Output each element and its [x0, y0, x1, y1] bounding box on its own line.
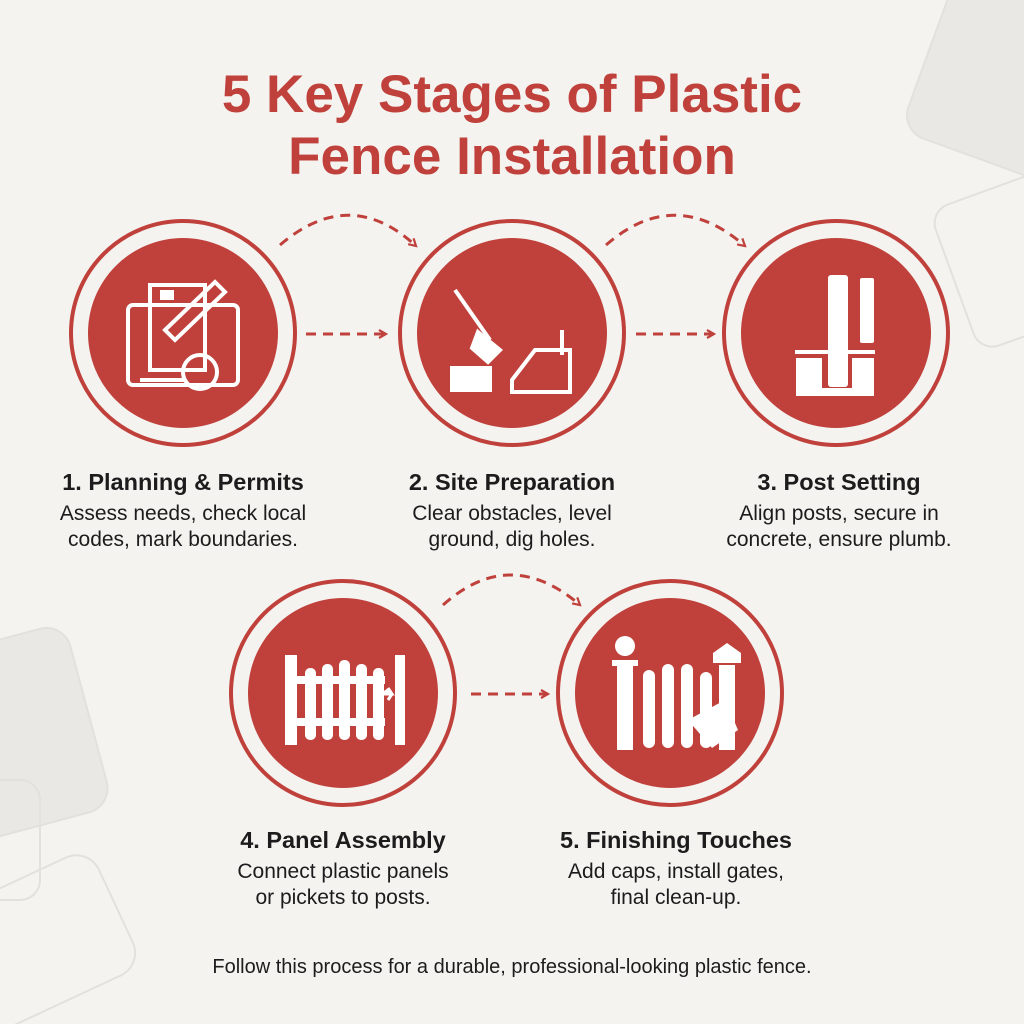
title [222, 65, 802, 186]
text: step 4: Connect plastic panels [237, 860, 449, 883]
title: Fence Installation [288, 127, 736, 186]
icon: panel [285, 655, 405, 745]
text: step 2: Clear obstacles, level [412, 502, 612, 525]
icon: planning [128, 282, 238, 389]
text: step 1: codes, mark boundaries. [68, 528, 298, 551]
title: 5 Key Stages of Plastic [222, 65, 802, 124]
text: step 3 [726, 469, 952, 551]
icon: shovel [452, 290, 570, 392]
text: step 5 [560, 827, 792, 909]
icon: post [795, 275, 875, 396]
text: step 5: final clean-up. [611, 886, 741, 909]
text: step 4: or pickets to posts. [255, 886, 431, 909]
text: step 3: Align posts, secure in [739, 502, 939, 525]
text: step 1: Assess needs, check local [60, 502, 306, 525]
text: step 3: 3. Post Setting [757, 469, 921, 495]
text: step 2: ground, dig holes. [429, 528, 595, 551]
arrows [280, 215, 745, 694]
icon: finishing [612, 636, 741, 750]
text: step 2: 2. Site Preparation [409, 469, 615, 495]
text: step 4: 4. Panel Assembly [240, 827, 446, 853]
circles [71, 221, 948, 805]
text: step 1: 1. Planning & Permits [62, 469, 304, 495]
footer: Follow this process for a durable, professional-looking plastic fence. [212, 956, 812, 978]
text: step 5: Add caps, install gates, [568, 860, 784, 883]
text: step 1 [60, 469, 306, 551]
text: step 2 [409, 469, 615, 551]
text: step 3: concrete, ensure plumb. [726, 528, 952, 551]
text: step 5: 5. Finishing Touches [560, 827, 792, 853]
text: step 4 [237, 827, 449, 909]
